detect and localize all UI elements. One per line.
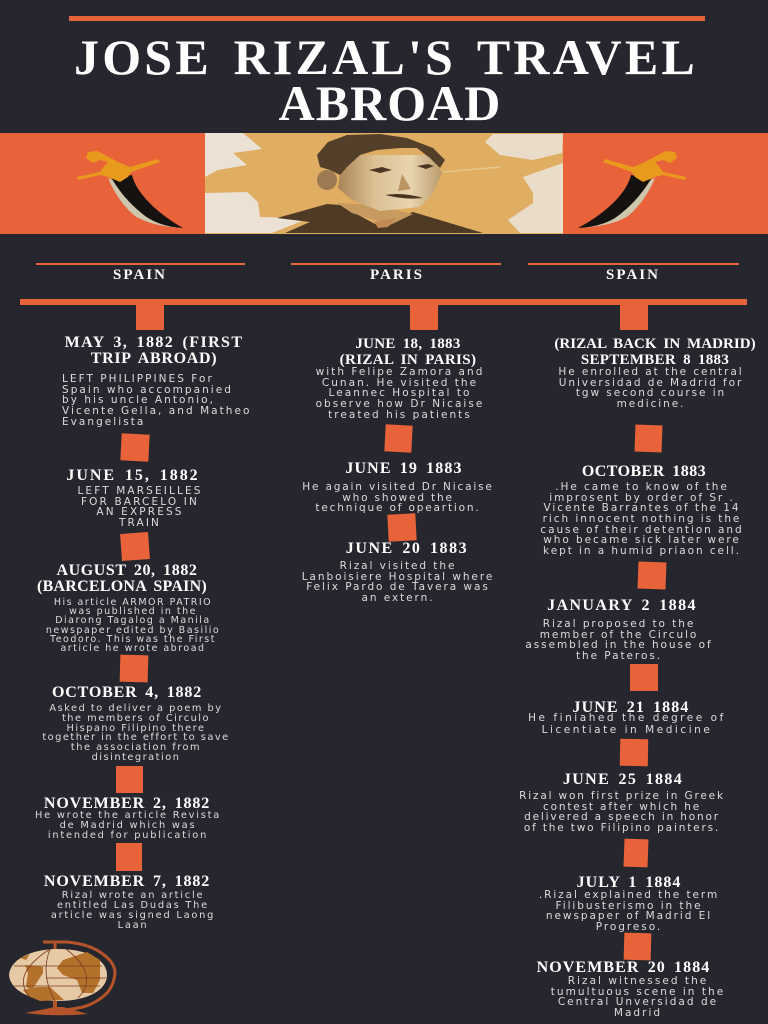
text: June 19 1883: [302, 481, 494, 514]
marker: [410, 305, 438, 330]
heading: June 18, 1883: JUNE 18, 1883: [355, 336, 461, 352]
marker: [116, 843, 142, 871]
text: January 2 1884: Rizal proposed to the: [543, 618, 695, 630]
marker: [620, 305, 648, 330]
text: October 4, 1882: the association from: [71, 742, 201, 753]
text: August 20, 1882: [46, 597, 220, 654]
marker: [120, 433, 150, 462]
text: June 15, 1882: LEFT MARSEILLES: [77, 485, 203, 497]
text: June 15, 1882: TRAIN: [119, 517, 161, 529]
text: June 25 1884: of the two Filipino painters.: [524, 822, 720, 834]
text: June 18, 1883: treated his patients: [328, 409, 472, 421]
icon: globe: [9, 940, 116, 1016]
text: October 4, 1882: the members of Circulo: [62, 713, 210, 724]
text: July 1 1884: Progreso.: [596, 921, 662, 933]
text: June 20 1883: [302, 560, 494, 604]
heading: September 8 1883: (RIZAL BACK IN MADRID): [554, 336, 756, 352]
column label: Spain: SPAIN: [113, 267, 167, 283]
text: October 1883: cause of their detention and: [540, 524, 744, 536]
heading: October 1883: OCTOBER 1883: [582, 463, 706, 480]
marker: [136, 305, 164, 330]
text: August 20, 1882: Teodoro. This was the First: [50, 634, 216, 645]
text: January 2 1884: the Pateros.: [576, 650, 662, 662]
title: JOSE RIZAL'S TRAVEL: [74, 29, 698, 85]
heading: May 3, 1882: MAY 3, 1882 (FIRST: [65, 334, 243, 351]
text: June 20 1883: Felix Pardo de Tavera was: [306, 581, 490, 593]
banner with portrait and daggers: [0, 133, 768, 234]
timeline bar: [20, 299, 747, 305]
text: June 19 1883: technique of opeartion.: [315, 502, 481, 514]
heading: August 20, 1882: AUGUST 20, 1882: [57, 562, 197, 579]
text: October 1883: improsent by order of Sr .: [549, 492, 735, 504]
title: [74, 29, 698, 131]
text: September 8 1883: Universidad de Madrid for: [559, 376, 743, 388]
heading: June 21 1884: JUNE 21 1884: [572, 699, 689, 716]
text: June 19 1883: He again visited Dr Nicaise: [302, 481, 494, 493]
heading: May 3, 1882: TRIP ABROAD): [91, 350, 217, 367]
text: November 20 1884: [551, 975, 725, 1019]
text: July 1 1884: [539, 889, 719, 933]
text: September 8 1883: He enrolled at the central: [558, 366, 744, 378]
text: May 3, 1882: by his uncle Antonio,: [62, 394, 215, 406]
text: November 7, 1882: Laan: [118, 920, 148, 931]
marker: [620, 739, 648, 766]
text: October 4, 1882: [42, 703, 230, 763]
text: October 1883: who became sick later were: [543, 534, 741, 546]
text: November 2, 1882: He wrote the article Revista: [35, 810, 221, 821]
heading: August 20, 1882: [37, 562, 207, 595]
marker: [624, 839, 648, 867]
text: October 4, 1882: Hispano Filipino there: [66, 723, 206, 734]
marker: [638, 562, 666, 589]
text: June 18, 1883: Cunan. He visited the: [322, 376, 478, 388]
text: June 15, 1882: AN EXPRESS: [96, 506, 184, 518]
heading: August 20, 1882: (BARCELONA SPAIN): [37, 578, 207, 595]
text: November 2, 1882: [35, 810, 221, 841]
column label: Paris: PARIS: [370, 267, 424, 283]
column label: Spain: SPAIN: [606, 267, 660, 283]
text: June 25 1884: Rizal won first prize in Greek: [519, 790, 725, 802]
marker: [120, 655, 148, 682]
heading: June 25 1884: JUNE 25 1884: [563, 771, 683, 788]
heading: September 8 1883: SEPTEMBER 8 1883: [581, 352, 729, 368]
text: August 20, 1882: His article ARMOR PATRIO: [54, 597, 212, 608]
right dagger: [578, 151, 686, 228]
heading: September 8 1883: [554, 336, 756, 368]
text: October 1883: .He came to know of the: [555, 481, 729, 493]
text: June 15, 1882: [77, 485, 203, 529]
text: January 2 1884: assembled in the house of: [525, 639, 713, 651]
column rule 1: [36, 263, 245, 264]
text: October 4, 1882: together in the effort to save: [42, 732, 230, 743]
text: November 20 1884: Central Unversidad de: [558, 996, 718, 1008]
marker: [630, 664, 658, 691]
text: May 3, 1882: Vicente Gella, and Matheo: [62, 405, 251, 417]
text: October 4, 1882: disintegration: [92, 752, 180, 763]
heading: June 15, 1882: JUNE 15, 1882: [66, 467, 200, 484]
text: November 7, 1882: article was signed Laong: [51, 910, 215, 921]
portrait: [205, 133, 563, 234]
text: June 18, 1883: with Felipe Zamora and: [316, 366, 484, 378]
top rule: [69, 16, 705, 21]
text: September 8 1883: tgw second course in: [576, 387, 726, 399]
text: June 18, 1883: [316, 366, 484, 421]
column rule 3: [528, 263, 739, 264]
marker: [387, 513, 417, 542]
text: October 4, 1882: Asked to deliver a poem by: [49, 703, 223, 714]
heading: November 2, 1882: NOVEMBER 2, 1882: [44, 795, 210, 812]
text: May 3, 1882: LEFT PHILIPPINES For: [62, 373, 214, 385]
text: July 1 1884: Filibusterismo in the: [556, 900, 702, 912]
heading: July 1 1884: JULY 1 1884: [577, 874, 681, 891]
text: October 1883: rich innocent nothing is the: [543, 513, 741, 525]
text: June 20 1883: an extern.: [361, 592, 435, 604]
text: August 20, 1882: Diarong Tagalog a Manila: [55, 615, 211, 626]
text: November 7, 1882: entitled Las Dudas The: [57, 900, 209, 911]
text: November 7, 1882: Rizal wrote an article: [62, 890, 204, 901]
text: July 1 1884: .Rizal explained the term: [539, 889, 719, 901]
text: January 2 1884: [525, 618, 713, 662]
text: November 20 1884: Rizal witnessed the: [568, 975, 708, 987]
text: June 18, 1883: observe how Dr Nicaise: [316, 398, 484, 410]
text: June 15, 1882: FOR BARCELO IN: [81, 496, 199, 508]
text: June 25 1884: contest after which he: [543, 800, 701, 812]
text: May 3, 1882: Spain who accompanied: [62, 384, 233, 396]
text: November 20 1884: Madrid: [614, 1007, 662, 1019]
heading: June 20 1883: JUNE 20 1883: [346, 540, 468, 557]
text: September 8 1883: [558, 366, 744, 410]
text: June 25 1884: delivered a speech in honor: [524, 811, 720, 823]
text: May 3, 1882: Evangelista: [62, 416, 145, 428]
marker: [624, 933, 651, 960]
text: July 1 1884: newspaper of Madrid El: [546, 910, 712, 922]
text: May 3, 1882: [62, 373, 251, 428]
text: November 2, 1882: intended for publication: [48, 830, 208, 841]
text: November 2, 1882: de Madrid which was: [60, 820, 196, 831]
text: October 1883: [540, 481, 744, 557]
heading: January 2 1884: JANUARY 2 1884: [547, 597, 697, 614]
heading: June 19 1883: JUNE 19 1883: [345, 460, 463, 477]
text: November 7, 1882: [51, 890, 215, 931]
marker: [635, 425, 662, 452]
heading: November 7, 1882: NOVEMBER 7, 1882: [44, 873, 210, 890]
heading: October 4, 1882: OCTOBER 4, 1882: [52, 684, 202, 701]
text: January 2 1884: member of the Circulo: [540, 628, 698, 640]
text: October 1883: kept in a humid priaon cell.: [543, 545, 741, 557]
text: August 20, 1882: newspaper edited by Basilio: [46, 625, 220, 636]
marker: [384, 424, 413, 453]
heading: November 20 1884: NOVEMBER 20 1884: [537, 959, 710, 976]
text: September 8 1883: medicine.: [617, 398, 685, 410]
heading: May 3, 1882: [64, 334, 243, 367]
text: November 20 1884: tumultuous scene in the: [551, 986, 725, 998]
text: June 18, 1883: Leannec Hospital to: [329, 387, 471, 399]
heading: June 18, 1883: [340, 336, 476, 368]
text: June 21 1884: [528, 712, 726, 736]
title: ABROAD: [279, 75, 501, 131]
text: June 20 1883: Lanboisiere Hospital where: [302, 570, 494, 582]
text: June 19 1883: who showed the: [342, 492, 454, 504]
text: June 21 1884: He finiahed the degree of: [528, 712, 726, 724]
left dagger: [77, 151, 183, 228]
marker: [120, 532, 150, 561]
text: August 20, 1882: was published in the: [69, 606, 197, 617]
text: August 20, 1882: article he wrote abroad: [60, 643, 206, 654]
text: October 1883: Vicente Barrantes of the 14: [543, 502, 740, 514]
heading: June 18, 1883: (RIZAL IN PARIS): [340, 352, 476, 368]
text: June 20 1883: Rizal visited the: [340, 560, 456, 572]
marker: [116, 766, 143, 793]
text: June 25 1884: [519, 790, 725, 834]
text: June 21 1884: Licentiate in Medicine: [542, 724, 712, 736]
column rule 2: [291, 263, 501, 264]
